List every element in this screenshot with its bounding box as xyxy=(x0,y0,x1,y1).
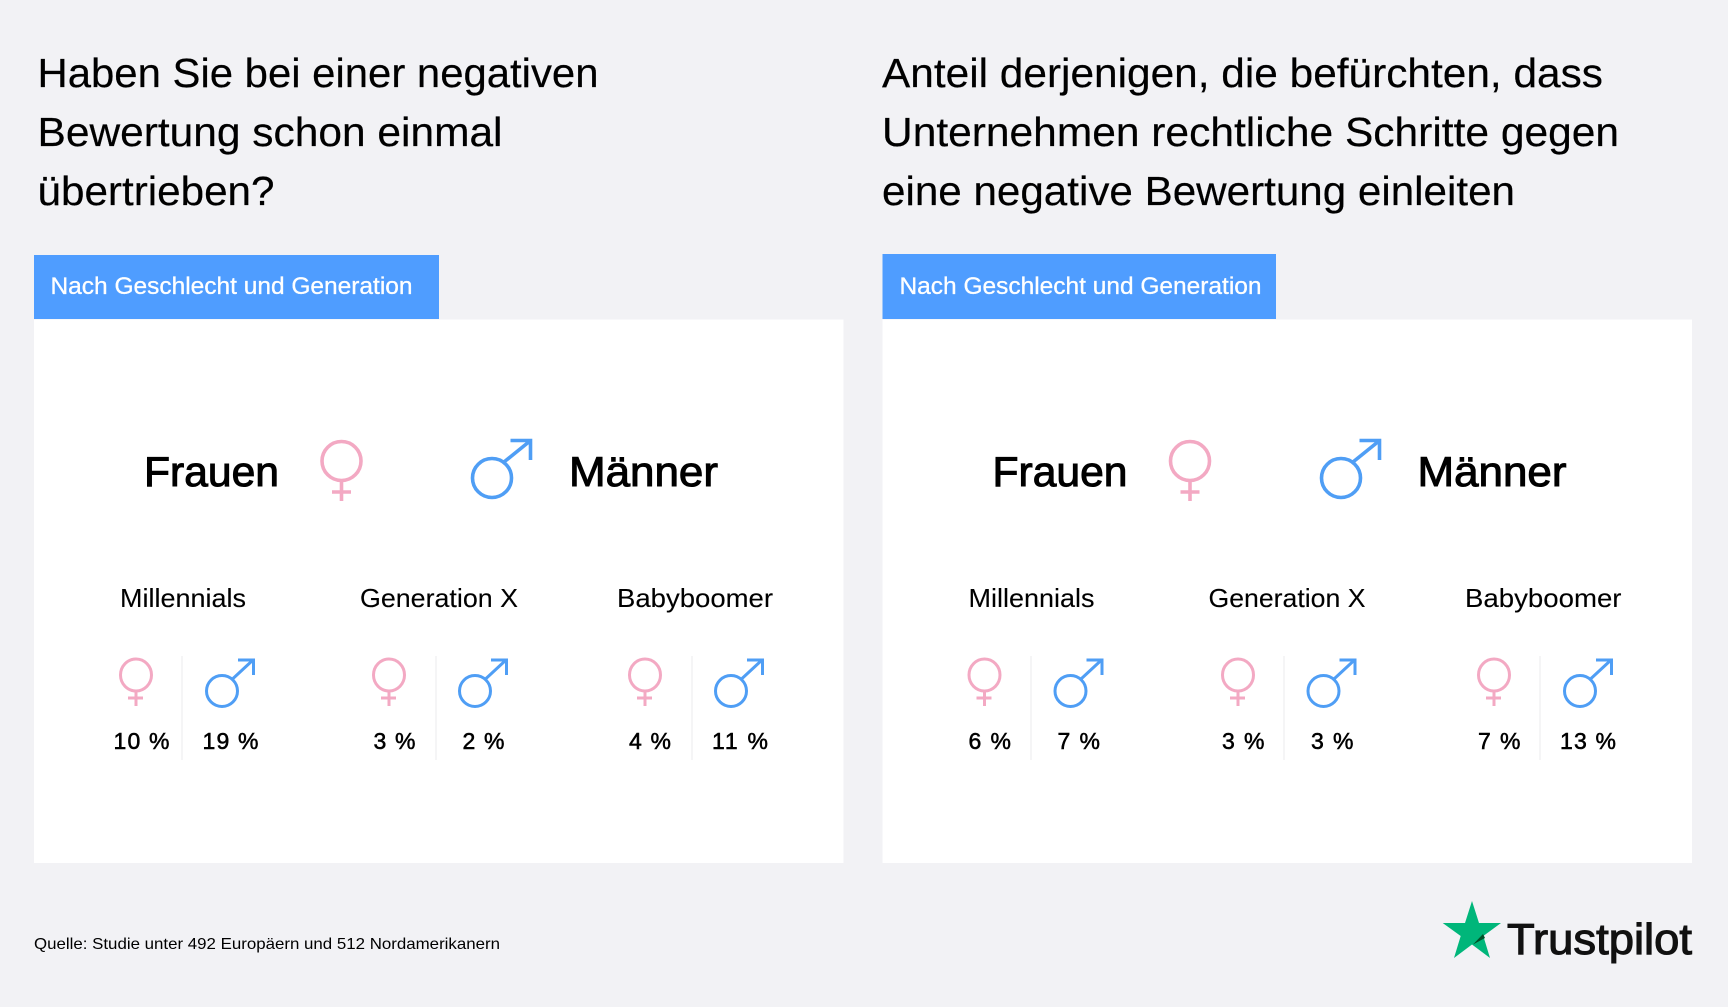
group: Babyboomer: 13 % xyxy=(1560,728,1616,754)
group: Babyboomer: 11 % xyxy=(712,728,768,754)
group: Generation X: 3 % xyxy=(1311,728,1354,754)
wordmark: Trustpilot xyxy=(1507,915,1692,964)
group: Babyboomer: Babyboomer xyxy=(1465,583,1622,613)
group: Millennials xyxy=(968,583,1102,760)
right heading: Anteil derjenigen, die befürchten, dass xyxy=(882,50,1603,96)
group: Generation X xyxy=(1208,583,1366,760)
group: Generation X: 3 % xyxy=(1222,728,1264,754)
label: Frauen: Frauen xyxy=(992,448,1128,495)
group: Generation X xyxy=(360,583,518,760)
group: Millennials: Millennials xyxy=(120,583,246,613)
logo: Trustpilot xyxy=(1443,901,1692,964)
right panel xyxy=(882,320,1692,863)
group: Babyboomer xyxy=(1465,583,1622,760)
group: Babyboomer: 4 % xyxy=(629,728,671,754)
group: Millennials xyxy=(114,583,258,760)
group: Millennials: 7 % xyxy=(1058,728,1100,754)
left heading: übertrieben? xyxy=(38,168,274,214)
icon: large male symbol xyxy=(1322,440,1380,498)
right heading: eine negative Bewertung einleiten xyxy=(882,168,1515,214)
left column: exaggeration question xyxy=(34,50,844,863)
left tab: by gender and generation xyxy=(34,255,439,319)
left heading xyxy=(38,50,598,214)
group: Babyboomer: 7 % xyxy=(1478,728,1520,754)
icon: large female symbol xyxy=(1170,442,1210,501)
right heading xyxy=(882,50,1619,214)
right column: fear of legal action xyxy=(882,50,1692,863)
source note: Quelle: Studie unter 492 Europäern und 512 Nordamerikanern xyxy=(34,936,500,953)
group: Millennials: 19 % xyxy=(202,728,258,754)
group: Millennials: 6 % xyxy=(968,728,1011,754)
group: Generation X: 3 % xyxy=(374,728,416,754)
icon: large male symbol xyxy=(472,440,530,498)
left tab: by gender and generation: Nach Geschlecht und Generation xyxy=(50,273,412,300)
group: Babyboomer: Babyboomer xyxy=(617,583,773,613)
label: Frauen: Frauen xyxy=(144,448,279,495)
label: Männer: Männer xyxy=(1418,448,1567,495)
group: Generation X: Generation X xyxy=(360,583,518,613)
group: Millennials: 10 % xyxy=(114,728,170,754)
icon: green star xyxy=(1443,901,1501,958)
group: Babyboomer xyxy=(617,583,773,760)
group: Generation X: 2 % xyxy=(462,728,504,754)
group: Millennials: Millennials xyxy=(968,583,1094,613)
left panel xyxy=(34,320,844,863)
label: Männer: Männer xyxy=(569,448,718,495)
right heading: Unternehmen rechtliche Schritte gegen xyxy=(882,109,1619,155)
left heading: Haben Sie bei einer negativen xyxy=(38,50,598,96)
right tab: by gender and generation: Nach Geschlecht und Generation xyxy=(900,273,1262,300)
group: Generation X: Generation X xyxy=(1208,583,1366,613)
left heading: Bewertung schon einmal xyxy=(38,109,502,155)
icon: large female symbol xyxy=(322,442,361,501)
right tab: by gender and generation xyxy=(882,254,1276,319)
